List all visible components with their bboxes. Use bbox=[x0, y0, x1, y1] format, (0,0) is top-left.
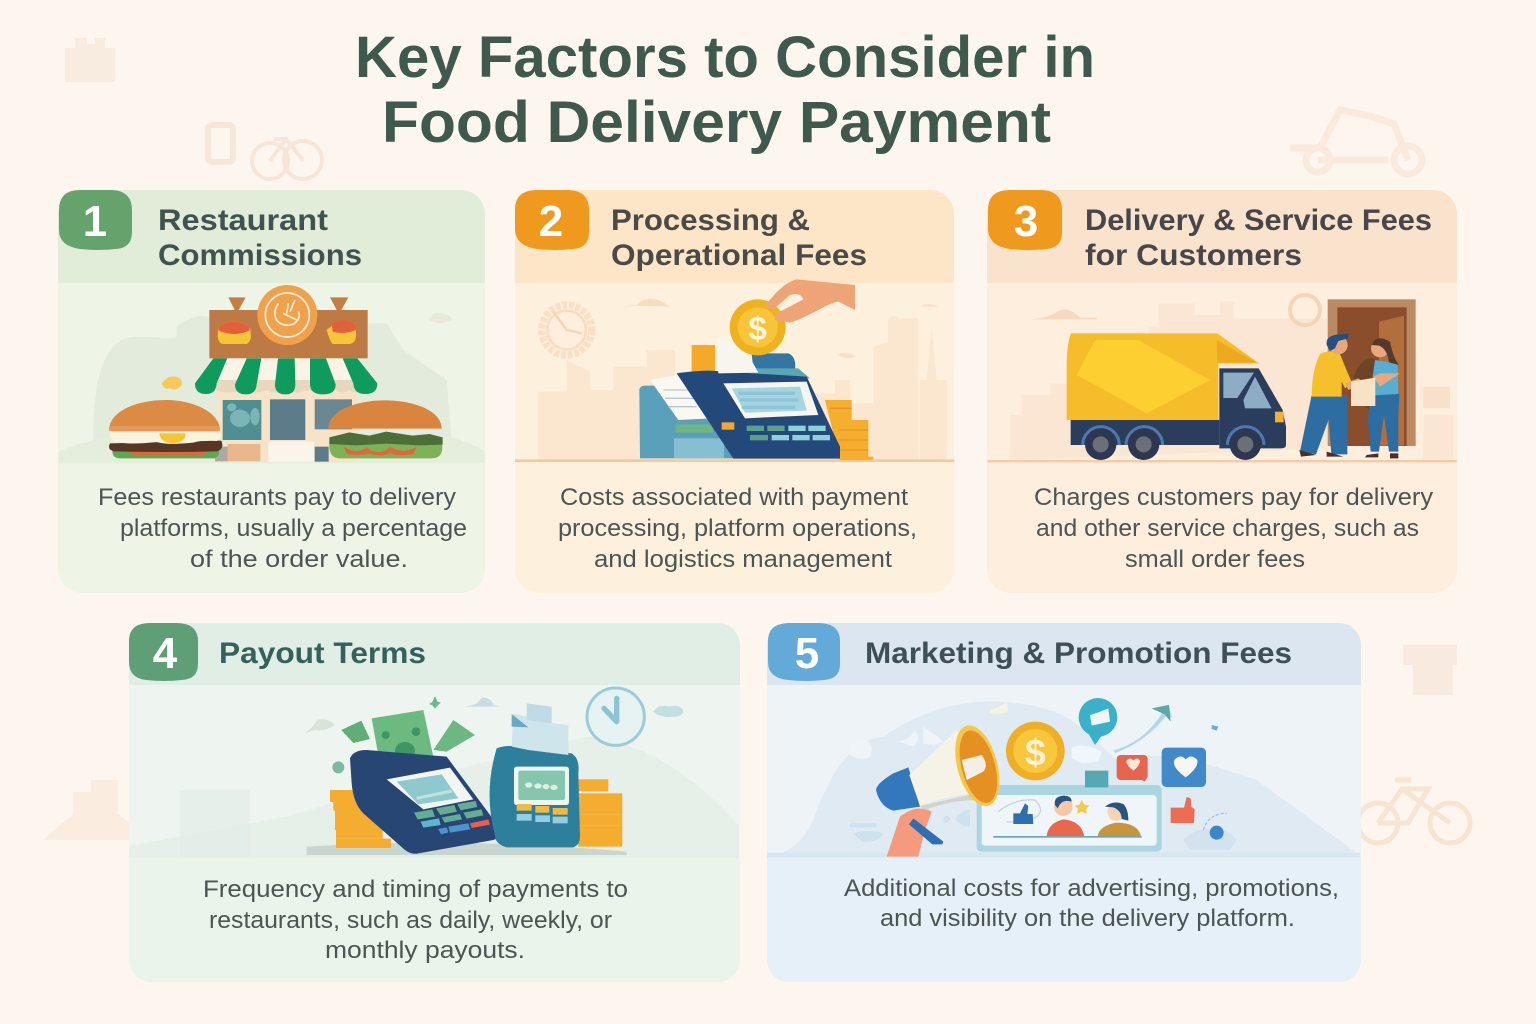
number badge 3 bbox=[988, 190, 1062, 250]
illustration: megaphone, coin, social icons: $ bbox=[1025, 731, 1046, 773]
heading: Delivery & Service Fees bbox=[1085, 204, 1432, 237]
number badge 2 bbox=[515, 190, 589, 250]
description: and visibility on the delivery platform. bbox=[880, 905, 1295, 932]
icon: ghost scooter bbox=[1290, 110, 1422, 174]
title: Key Factors to Consider in bbox=[355, 25, 1095, 90]
heading: Payout Terms bbox=[219, 637, 426, 670]
description: monthly payouts. bbox=[325, 937, 525, 964]
heading: Processing & bbox=[611, 204, 810, 237]
illustration: payment terminal with coin and hand: $ bbox=[748, 311, 767, 348]
panel: delivery and service fees bbox=[987, 190, 1457, 593]
description: and other service charges, such as bbox=[1036, 515, 1419, 542]
card background bbox=[987, 190, 1457, 593]
card background bbox=[129, 623, 740, 982]
title: Food Delivery Payment bbox=[382, 90, 1051, 155]
heading: Commissions bbox=[158, 239, 362, 272]
description: Additional costs for advertising, promotions, bbox=[844, 875, 1339, 902]
number badge 1: 1 bbox=[83, 197, 107, 246]
description bbox=[558, 484, 917, 573]
card background bbox=[58, 190, 485, 593]
panel: restaurant commissions bbox=[58, 190, 485, 593]
illustration: delivery truck and handoff at door bbox=[987, 295, 1457, 462]
panel: marketing and promotion fees bbox=[767, 623, 1363, 982]
description: Fees restaurants pay to delivery bbox=[98, 484, 456, 511]
heading bbox=[611, 204, 867, 272]
description: restaurants, such as daily, weekly, or bbox=[209, 907, 612, 934]
description bbox=[1034, 484, 1433, 573]
panel: payout terms bbox=[129, 623, 740, 982]
number badge 5: 5 bbox=[795, 629, 819, 678]
description: platforms, usually a percentage bbox=[120, 515, 467, 542]
description: small order fees bbox=[1125, 546, 1305, 573]
number badge 5 bbox=[768, 623, 840, 681]
heading: Operational Fees bbox=[611, 239, 867, 272]
card background bbox=[515, 190, 954, 593]
description: and logistics management bbox=[594, 546, 892, 573]
number badge 3: 3 bbox=[1014, 197, 1038, 246]
card background bbox=[767, 623, 1361, 982]
panel: processing and operational fees bbox=[515, 190, 954, 593]
icon: ghost bicycle left bbox=[252, 139, 322, 179]
description bbox=[203, 876, 628, 964]
heading: Marketing & Promotion Fees bbox=[865, 637, 1292, 670]
title bbox=[355, 25, 1095, 155]
description: of the order value. bbox=[190, 546, 408, 573]
icon: ghost bicycle right bbox=[1358, 780, 1470, 843]
icon: ghost shop right bbox=[1403, 645, 1457, 695]
icon: ghost building bbox=[65, 38, 115, 82]
description: Costs associated with payment bbox=[560, 484, 908, 511]
description: Frequency and timing of payments to bbox=[203, 876, 628, 903]
number badge 1 bbox=[59, 190, 132, 250]
heading bbox=[158, 204, 362, 272]
number badge 2: 2 bbox=[539, 197, 563, 246]
icon: ghost phone bbox=[208, 125, 233, 162]
number badge 4 bbox=[129, 623, 198, 681]
icon: ghost delivery box left bbox=[43, 780, 150, 840]
description bbox=[98, 484, 467, 573]
description bbox=[844, 875, 1339, 932]
heading bbox=[1085, 204, 1432, 272]
illustration: payment terminal with coin and hand bbox=[515, 279, 954, 462]
heading: for Customers bbox=[1085, 239, 1302, 272]
illustration: payment terminals with cash and clock bbox=[180, 688, 683, 857]
description: Charges customers pay for delivery bbox=[1034, 484, 1433, 511]
heading: Restaurant bbox=[158, 204, 328, 237]
illustration: restaurant storefront with burgers bbox=[58, 285, 485, 463]
description: processing, platform operations, bbox=[558, 515, 917, 542]
number badge 4: 4 bbox=[153, 629, 178, 678]
background ghost icons bbox=[43, 38, 1470, 843]
illustration: megaphone, coin, social icons bbox=[767, 698, 1363, 858]
